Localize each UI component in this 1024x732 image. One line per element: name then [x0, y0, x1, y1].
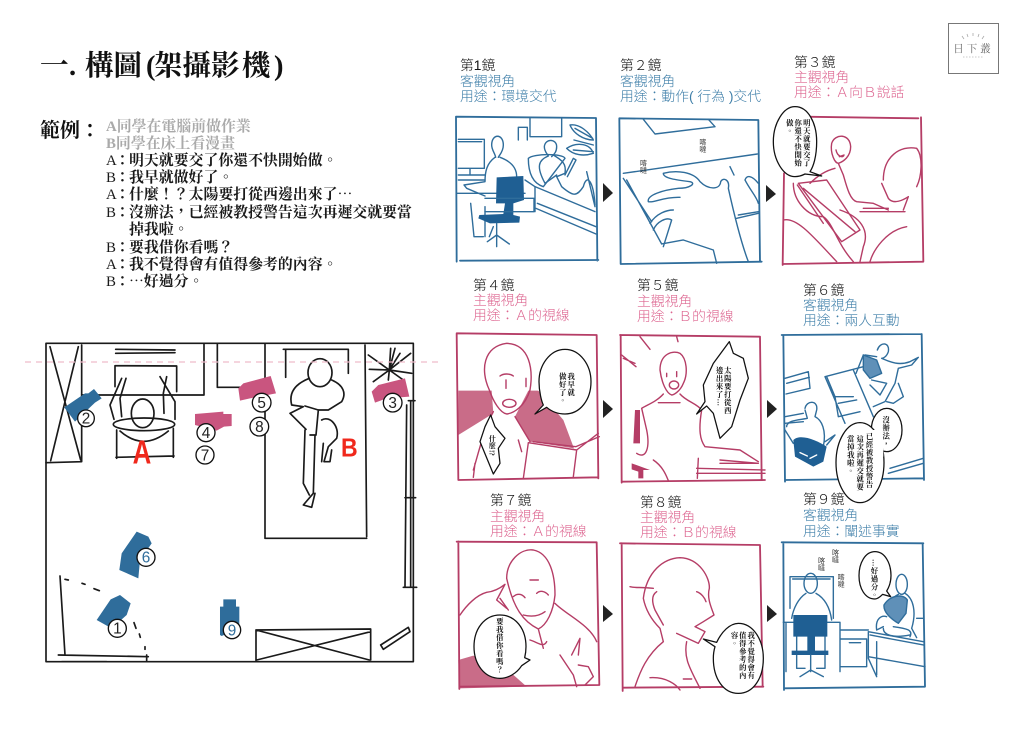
script text block: ⋯好過分。: [129, 272, 203, 290]
title: 構: [85, 50, 114, 82]
speech bubbles: [836, 408, 902, 503]
script text block: [106, 117, 412, 290]
camera 4 and 7: 4: [202, 425, 211, 442]
shot 2 caption: 用途：動作( 行為 )交代: [620, 89, 761, 104]
person A: [110, 377, 175, 458]
shot 3 caption: 第３鏡: [794, 55, 836, 70]
script text block: 明天就要交了你還不快開始做。: [129, 151, 337, 169]
speech bubble: 明天就要交了: [802, 118, 812, 167]
person B: [290, 359, 344, 507]
script text block: 沒辦法，已經被教授警告這次再遲交就要當: [129, 203, 412, 221]
jagged speech bubble: 太陽要打從西: [723, 366, 733, 415]
shot 9 caption: 第９鏡: [803, 492, 845, 507]
arrow 5: [603, 605, 613, 622]
script text block: ：: [115, 274, 130, 290]
script text block: B: [106, 274, 116, 290]
script text block: A: [106, 187, 117, 203]
title: 圖: [114, 50, 142, 82]
jagged speech bubble: [480, 415, 505, 474]
title: .: [69, 51, 76, 82]
shot 6 caption: 用途：兩人互動: [803, 313, 900, 328]
camera 6: 6: [142, 550, 150, 567]
script text block: ：: [115, 170, 130, 186]
label B: B: [341, 432, 358, 462]
panel: shot 9: [782, 492, 925, 690]
shot 8 sketch: [620, 543, 763, 693]
shot 5 caption: [637, 278, 734, 324]
room border: [46, 343, 413, 662]
speech bubble: 值得參考的內: [738, 631, 748, 680]
sound effects: 喀噠: [699, 137, 706, 153]
shot 7 caption: 用途：Ａ的視線: [490, 524, 587, 539]
shot 1 caption: [460, 58, 557, 104]
camera 9: [220, 599, 241, 639]
script text block: B: [106, 170, 116, 186]
shot 1 caption: 第1鏡: [460, 58, 495, 73]
speech bubble: …好過分。: [870, 559, 879, 599]
jagged speech bubble: [697, 342, 748, 438]
arrow 6: [767, 605, 777, 622]
camera 2: 2: [82, 411, 90, 428]
camera 1: [97, 595, 131, 638]
jagged speech bubble: !?: [487, 450, 495, 456]
script text block: 要我借你看嗎？: [129, 238, 233, 256]
shot 2 caption: [620, 58, 761, 104]
speech bubble: [474, 615, 530, 678]
panel: shot 6: [782, 283, 924, 503]
shot 7 caption: [490, 493, 587, 539]
script text block: 我早就做好了。: [129, 168, 233, 186]
shot 9 sketch: 喀噠: [837, 572, 845, 588]
script text block: ：: [115, 205, 130, 221]
speech bubble: 容。: [730, 631, 739, 648]
shot 2 sketch: [619, 118, 762, 264]
camera 5 and 8: 5: [257, 395, 266, 412]
speech bubble: [535, 349, 591, 414]
shot 4 caption: 用途：Ａ的視線: [473, 308, 570, 323]
title: 攝: [182, 50, 212, 82]
shot 8 caption: 用途：Ｂ的視線: [640, 525, 737, 540]
panel: shot 1: [456, 58, 598, 262]
camera 5 and 8: [238, 376, 276, 436]
script text block: 什麼！？太陽要打從西邊出來了⋯: [129, 185, 352, 203]
shot 1 caption: 用途：環境交代: [460, 89, 557, 104]
shot 2 sketch: 喀噠: [639, 158, 647, 174]
script text block: B: [106, 205, 116, 221]
shot 9 caption: 用途：闡述事實: [803, 524, 900, 539]
shot 9 sketch: [782, 542, 925, 690]
shot 4 caption: 第４鏡: [473, 278, 515, 293]
logo: 日下叢: [953, 42, 994, 55]
label A: A: [133, 435, 151, 472]
arrow 3: [603, 400, 613, 418]
speech bubble: [703, 623, 763, 693]
script text block: A: [106, 257, 117, 273]
camera 2: [64, 389, 102, 428]
plant: [368, 348, 412, 382]
title: 機: [242, 50, 272, 82]
cabinet: [256, 629, 371, 661]
speech bubbles: 沒辦法，: [882, 415, 891, 448]
shot 3 sketch: [773, 107, 923, 265]
script text block: B: [106, 240, 116, 256]
camera 5 and 8: 8: [255, 419, 264, 436]
shot 5 caption: 用途：Ｂ的視線: [637, 309, 734, 324]
shot 8 caption: 主觀視角: [640, 510, 695, 525]
shot 7 sketch: [457, 542, 599, 689]
shot 7 caption: 主觀視角: [490, 509, 545, 524]
shot 2 caption: 第２鏡: [620, 58, 662, 73]
shot 3 caption: 用途：Ａ向Ｂ說話: [794, 85, 905, 100]
bed and side table: [217, 344, 367, 538]
shot 3 caption: [794, 55, 905, 100]
jagged speech bubble: 邊出來了…: [715, 366, 724, 407]
script text block: 我不覺得會有值得參考的內容。: [129, 255, 337, 273]
shot 5 caption: 第５鏡: [637, 278, 679, 293]
script text block: B同學在床上看漫畫: [106, 134, 235, 152]
arrow 4: [767, 400, 777, 418]
script text block: ：: [115, 187, 130, 203]
speech bubble: 做。: [785, 118, 795, 135]
title: (: [146, 51, 156, 82]
camera 3: [372, 378, 409, 412]
speech bubble: [859, 552, 891, 599]
shot 7 caption: 第７鏡: [490, 493, 532, 508]
shot 1 caption: 客觀視角: [460, 74, 515, 89]
shot 6 sketch: [782, 334, 924, 503]
shot 5 caption: 主觀視角: [637, 294, 692, 309]
script text block: ：: [115, 240, 130, 256]
panel: shot 5: [620, 278, 765, 483]
title: 架: [154, 50, 183, 82]
camera 6: [119, 532, 155, 578]
speech bubbles: 這次再遲交就要: [856, 434, 865, 491]
shot 9 caption: 客觀視角: [803, 508, 858, 523]
shot 4 caption: [473, 278, 570, 323]
title: 影: [211, 50, 240, 82]
speech bubble: 做好了。: [558, 372, 568, 405]
panel: shot 2: [619, 58, 762, 264]
speech bubble: 我早就: [567, 372, 576, 397]
arrow 2: [766, 185, 776, 202]
script text block: A: [106, 153, 117, 169]
camera 4 and 7: [195, 412, 232, 464]
script text block: ：: [115, 153, 130, 169]
shot 5 sketch: [620, 335, 765, 483]
shot 9 sketch: 喀噠: [817, 556, 825, 572]
title: ): [274, 51, 284, 82]
speech bubbles: 當掉我啦。: [846, 434, 856, 475]
desk: [82, 344, 204, 395]
shot 8 caption: [640, 495, 737, 540]
panel: shot 7: [457, 493, 599, 689]
shot 6 caption: 第６鏡: [803, 283, 845, 298]
window: [403, 401, 417, 587]
panel: shot 4: [457, 278, 599, 480]
logo: [948, 24, 998, 74]
speech bubble: 我不覺得會有: [747, 631, 756, 680]
arrow 1: [603, 183, 613, 202]
camera 1: 1: [113, 621, 122, 638]
shot 8 caption: 第８鏡: [640, 495, 682, 510]
sound effects: 喀噠: [831, 548, 839, 564]
example label: 範例：: [40, 118, 100, 142]
camera 3: 3: [388, 395, 397, 412]
shot 6 caption: 客觀視角: [803, 298, 858, 313]
floor plan: [46, 343, 417, 662]
script text block: A同學在電腦前做作業: [106, 117, 253, 135]
speech bubble: 你還不快開始: [794, 118, 803, 167]
shot 9 caption: [803, 492, 900, 539]
jagged speech bubble: 什麼: [487, 434, 496, 450]
wardrobe: [46, 345, 82, 463]
panel: shot 3: [773, 55, 923, 265]
shot 4 sketch: [457, 333, 599, 480]
shot 3 caption: 主觀視角: [794, 70, 849, 85]
shot 6 caption: [803, 283, 900, 328]
script text block: ：: [115, 257, 130, 273]
title: 一: [40, 51, 69, 82]
shot 1 sketch: [456, 117, 598, 262]
camera 9: 9: [228, 622, 236, 639]
speech bubble: [773, 107, 822, 177]
shot 4 caption: 主觀視角: [473, 293, 528, 308]
shot 2 caption: 客觀視角: [620, 74, 675, 89]
panel: shot 8: [620, 495, 763, 693]
door and swing: [58, 576, 148, 662]
script text block: 掉我啦。: [129, 220, 189, 238]
camera 4 and 7: 7: [201, 447, 209, 464]
speech bubbles: 已經被教授警告: [865, 433, 874, 489]
speech bubble: 要我借你看嗎？: [495, 617, 505, 674]
small furniture: [381, 627, 410, 649]
